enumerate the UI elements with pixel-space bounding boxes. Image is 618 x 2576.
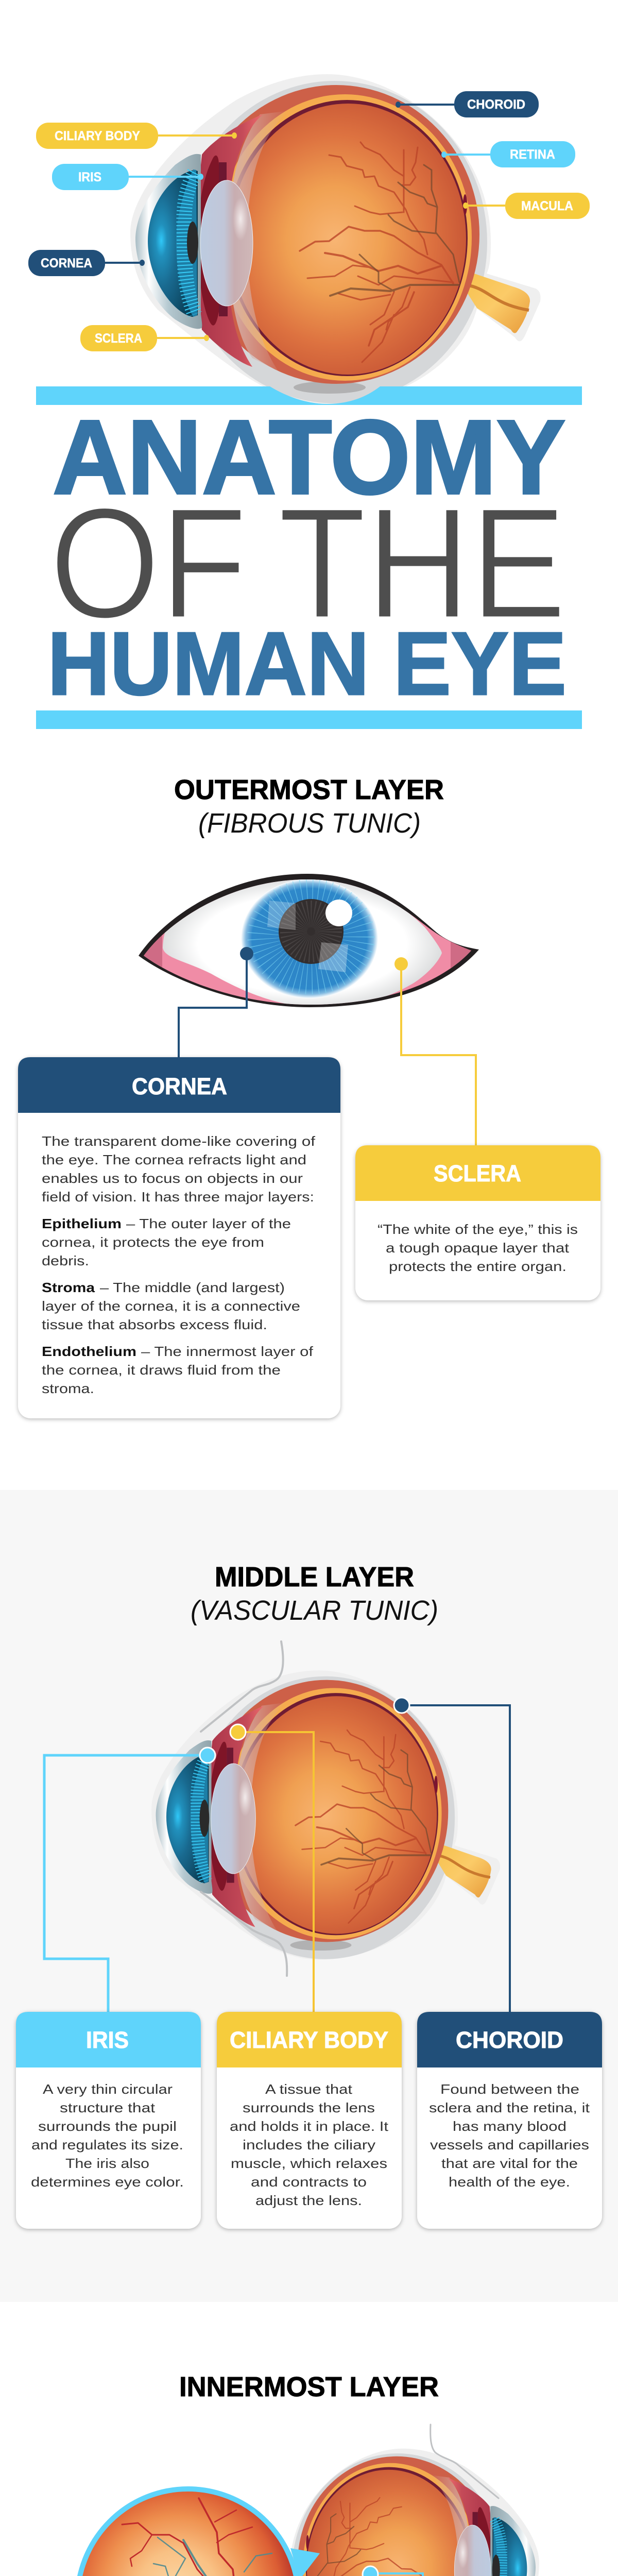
choroid description: has many blood <box>453 2119 566 2134</box>
cornea description: the cornea, it draws fluid from the <box>42 1362 281 1378</box>
heading: outermost layer: (FIBROUS TUNIC) <box>198 808 421 839</box>
cornea description: Epithelium <box>42 1216 122 1231</box>
label: choroid: CHOROID <box>467 97 525 112</box>
choroid description: sclera and the retina, it <box>429 2100 590 2115</box>
iris description: surrounds the pupil <box>38 2119 177 2134</box>
ciliary body description: includes the ciliary <box>243 2137 375 2153</box>
title line: of the <box>49 475 566 652</box>
ciliary body description: and contracts to <box>251 2174 367 2190</box>
connector: ciliary body <box>230 1724 314 2013</box>
cornea description: tissue that absorbs excess fluid. <box>42 1317 267 1332</box>
sclera description: a tough opaque layer that <box>386 1240 570 1256</box>
ciliary body description: and holds it in place. It <box>230 2119 389 2134</box>
cornea description: enables us to focus on objects in our <box>42 1171 303 1186</box>
heading: middle layer: (VASCULAR TUNIC) <box>191 1595 438 1626</box>
heading: innermost layer: INNERMOST LAYER <box>179 2371 439 2402</box>
hero eye diagram <box>28 74 590 404</box>
choroid description <box>429 2081 590 2190</box>
heading: middle layer <box>191 1562 438 1626</box>
label: macula: MACULA <box>521 199 573 213</box>
cornea description: stroma. <box>42 1381 94 1396</box>
ciliary body description: adjust the lens. <box>255 2193 362 2208</box>
veins <box>142 2537 272 2576</box>
cornea description: layer of the cornea, it is a connective <box>42 1298 300 1314</box>
heading: middle layer: MIDDLE LAYER <box>215 1562 414 1592</box>
ciliary body description <box>230 2081 389 2208</box>
label: iris: IRIS <box>78 170 101 184</box>
eyelid lines <box>427 2425 499 2576</box>
cornea description: debris. <box>42 1253 89 1268</box>
panel: choroid <box>417 2012 602 2229</box>
iris description: and regulates its size. <box>31 2137 183 2153</box>
heading: outermost layer <box>174 774 444 839</box>
title block <box>36 386 582 729</box>
illustration: front view of eye <box>139 874 479 1010</box>
connector: iris <box>44 1748 215 2013</box>
title line: anatomy: ANATOMY <box>53 398 565 516</box>
panel: ciliary body: CILIARY BODY <box>230 2027 388 2053</box>
panel: ciliary body <box>217 2012 402 2229</box>
sclera description <box>377 1222 578 1274</box>
panel: choroid: CHOROID <box>456 2027 563 2053</box>
label: ciliary body: CILIARY BODY <box>55 129 140 143</box>
illustration: eye cross-section <box>130 74 541 404</box>
sclera description: protects the entire organ. <box>389 1259 566 1274</box>
connector: cornea <box>179 947 253 1058</box>
title line: of the: THE <box>278 475 566 652</box>
cornea description: – The innermost layer of <box>141 1344 314 1359</box>
choroid description: health of the eye. <box>449 2174 570 2190</box>
label: cornea <box>28 250 145 276</box>
eyelid lines <box>201 1641 287 1976</box>
cornea description: Stroma <box>42 1280 95 1295</box>
choroid description: Found between the <box>440 2081 579 2097</box>
heading: outermost layer: OUTERMOST LAYER <box>174 774 444 805</box>
illustration: retina fundus close-up <box>77 2489 320 2576</box>
label: macula <box>463 193 590 219</box>
choroid description: vessels and capillaries <box>430 2137 589 2153</box>
label: sclera: SCLERA <box>95 331 142 346</box>
label: choroid <box>396 91 539 117</box>
callout pointer <box>290 2548 320 2576</box>
ciliary body description: surrounds the lens <box>243 2100 375 2115</box>
label: cornea: CORNEA <box>41 256 92 270</box>
label: ciliary body <box>36 123 237 149</box>
iris description <box>31 2081 184 2190</box>
cornea description: – The middle (and largest) <box>100 1280 285 1295</box>
iris description: A very thin circular <box>43 2081 173 2097</box>
cornea description: Endothelium <box>42 1344 136 1359</box>
ciliary body description: A tissue that <box>265 2081 353 2097</box>
cornea description: the eye. The cornea refracts light and <box>42 1152 306 1167</box>
connector: choroid <box>394 1698 510 2013</box>
bottom accent bar <box>36 710 582 729</box>
top accent bar <box>36 386 582 405</box>
connector: sclera <box>394 957 476 1146</box>
section background: middle layer <box>0 1490 618 2302</box>
panel: sclera <box>355 1145 600 1300</box>
panel: sclera: SCLERA <box>434 1160 521 1187</box>
title line: human eye: HUMAN EYE <box>47 613 566 714</box>
illustration: side eye (mirrored) <box>255 2425 539 2576</box>
iris description: structure that <box>60 2100 156 2115</box>
iris description: The iris also <box>65 2156 149 2171</box>
panel: iris: IRIS <box>86 2027 129 2053</box>
sclera description: “The white of the eye,” this is <box>377 1222 578 1237</box>
cornea description <box>42 1133 316 1396</box>
connector: retina <box>363 2566 423 2576</box>
ciliary body description: muscle, which relaxes <box>231 2156 387 2171</box>
label: sclera <box>80 325 209 351</box>
iris description: determines eye color. <box>31 2174 184 2190</box>
cornea description: The transparent dome-like covering of <box>42 1133 316 1149</box>
cornea description: cornea, it protects the eye from <box>42 1234 264 1250</box>
panel: cornea: CORNEA <box>132 1073 227 1099</box>
choroid description: that are vital for the <box>441 2156 578 2171</box>
arteries <box>122 2498 276 2576</box>
label: retina: RETINA <box>510 147 555 162</box>
cornea description: – The outer layer of the <box>126 1216 291 1231</box>
panel: iris <box>16 2012 201 2229</box>
cornea description: field of vision. It has three major layers: <box>42 1189 314 1205</box>
panel: cornea <box>18 1057 340 1418</box>
title line: of the: OF <box>49 475 247 652</box>
label: retina <box>441 141 575 167</box>
label: iris <box>52 164 203 190</box>
illustration: middle eye <box>151 1641 500 1976</box>
